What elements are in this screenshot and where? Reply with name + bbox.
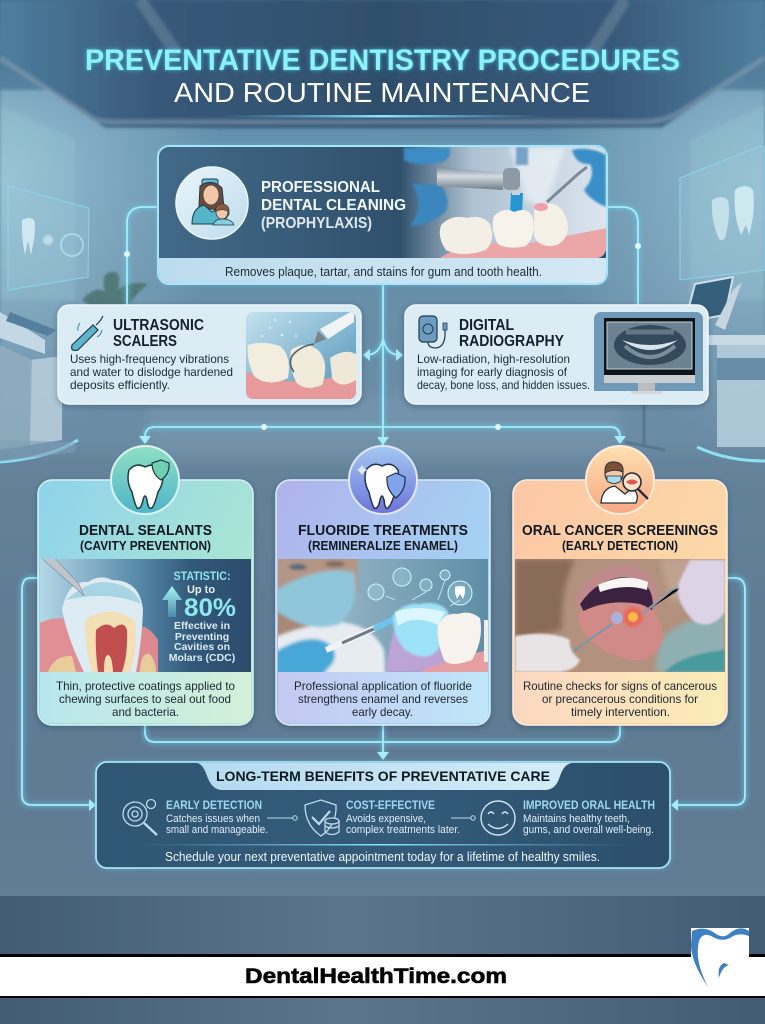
text: screenings description: Routine checks for signs of cancerous	[523, 679, 717, 693]
statistic callout: Up to	[187, 584, 215, 596]
heading: digital radiography: RADIOGRAPHY	[459, 333, 565, 350]
text: ultrasonic description: deposits efficiently.	[70, 378, 170, 392]
heading tab: LONG-TERM BENEFITS OF PREVENTATIVE CARE	[216, 768, 550, 784]
footer band	[0, 954, 765, 998]
photo: oral examination	[515, 559, 725, 672]
text: improved oral health: IMPROVED ORAL HEALTH	[523, 800, 655, 812]
title: PREVENTATIVE DENTISTRY PROCEDURES	[85, 44, 680, 77]
text: radiography description: decay, bone loss, and hidden issues.	[417, 378, 590, 392]
text: early detection: EARLY DETECTION	[166, 800, 262, 812]
text: ultrasonic description: and water to dislodge hardened	[70, 365, 233, 379]
heading: fluoride treatments: (REMINERALIZE ENAMEL)	[308, 539, 458, 553]
photo: fluoride application	[278, 559, 488, 672]
title	[85, 44, 680, 118]
text: screenings description	[515, 672, 725, 723]
connector lines and arrows	[22, 207, 745, 811]
logo: tooth	[691, 928, 749, 987]
statistic callout: Molars (CDC)	[169, 652, 235, 664]
text: screenings description: or precancerous conditions for	[542, 692, 698, 706]
text: sealants description	[40, 672, 251, 723]
text: fluoride description	[278, 672, 488, 723]
heading: professional dental cleaning	[261, 179, 406, 232]
text: ultrasonic description	[70, 352, 233, 392]
heading: dental sealants: (CAVITY PREVENTION)	[80, 539, 211, 553]
text: early detection: Catches issues when	[166, 813, 260, 825]
heading: oral cancer screenings: (EARLY DETECTION)	[562, 539, 678, 553]
heading: oral cancer screenings	[522, 523, 718, 553]
title: PREVENTATIVE DENTISTRY PROCEDURES	[85, 44, 680, 77]
text: early detection: small and manageable.	[166, 824, 268, 836]
arrow: upward increase	[162, 586, 182, 617]
heading: professional dental cleaning: PROFESSIONAL	[261, 179, 380, 196]
title: AND ROUTINE MAINTENANCE	[174, 77, 590, 108]
text: sealants description: chewing surfaces to seal out food	[59, 692, 231, 706]
statistic callout: Effective in	[174, 620, 230, 632]
icon: smiley	[481, 801, 515, 835]
caption strip: Removes plaque, tartar, and stains for gum and tooth health.	[225, 265, 542, 279]
panel: digital radiography	[405, 305, 708, 404]
call to action: Schedule your next preventative appointment today for a lifetime of healthy smiles.	[165, 850, 600, 864]
heading: professional dental cleaning: DENTAL CLEANING	[261, 197, 406, 214]
text: sealants description: and bacteria.	[112, 705, 179, 719]
statistic callout: Preventing	[175, 631, 229, 643]
text: radiography description: Low-radiation, high-resolution	[417, 352, 570, 366]
caption strip	[159, 258, 606, 283]
panel: dental sealants	[38, 446, 253, 725]
panel: oral cancer screenings	[513, 446, 727, 725]
text: early detection	[166, 800, 268, 836]
text: improved oral health: gums, and overall well-being.	[523, 824, 654, 836]
footer band: DentalHealthTime.com	[245, 965, 507, 988]
text: fluoride description: strengthens enamel and reverses	[298, 692, 468, 706]
photo: scaler on teeth	[246, 310, 356, 399]
text: ultrasonic description: Uses high-frequency vibrations	[70, 352, 229, 366]
text: screenings description: timely intervention.	[571, 705, 670, 719]
text: sealants description: Thin, protective coatings applied to	[56, 679, 235, 693]
heading: oral cancer screenings: ORAL CANCER SCREENINGS	[522, 523, 718, 539]
statistic callout: STATISTIC:	[174, 569, 230, 583]
icon: magnifier and gear	[123, 800, 157, 835]
icon: tooth with fluoride shield	[349, 446, 417, 514]
connector: detection to cost	[267, 816, 297, 820]
statistic callout	[162, 569, 236, 664]
icon: shield and coins	[305, 800, 339, 836]
heading: ultrasonic scalers: ULTRASONIC	[113, 317, 204, 334]
panel: professional dental cleaning	[157, 145, 608, 285]
heading: digital radiography: DIGITAL	[459, 317, 514, 334]
statistic callout: 80%	[184, 594, 236, 622]
heading: dental sealants: DENTAL SEALANTS	[79, 523, 212, 539]
panel: ultrasonic scalers	[58, 305, 361, 404]
heading: ultrasonic scalers	[113, 317, 204, 350]
photo: x-ray monitor	[594, 312, 703, 394]
heading: dental sealants	[79, 523, 212, 553]
text: radiography description: imaging for early diagnosis of	[417, 365, 568, 379]
connector: cost to health	[451, 816, 475, 820]
text: improved oral health: Maintains healthy teeth,	[523, 813, 630, 825]
heading: professional dental cleaning: (PROPHYLAXIS)	[261, 215, 372, 232]
heading: fluoride treatments	[298, 523, 468, 553]
text: radiography description	[417, 352, 590, 392]
panel: long-term benefits	[95, 761, 671, 869]
dark footer backdrop	[0, 896, 765, 1024]
icon: x-ray sensor	[419, 316, 447, 348]
heading: ultrasonic scalers: SCALERS	[113, 333, 177, 350]
text: improved oral health	[523, 800, 655, 836]
text: cost-effective: COST-EFFECTIVE	[346, 800, 435, 812]
text: cost-effective: complex treatments later.	[346, 824, 460, 836]
text: fluoride description: Professional application of fluoride	[294, 679, 472, 693]
heading: digital radiography	[459, 317, 565, 350]
text: fluoride description: early decay.	[352, 705, 413, 719]
heading tab	[197, 763, 572, 790]
panel: fluoride treatments	[270, 446, 490, 725]
icon: doctor with magnifier	[586, 446, 654, 514]
text: cost-effective: Avoids expensive,	[346, 813, 426, 825]
heading: fluoride treatments: FLUORIDE TREATMENTS	[298, 523, 468, 539]
icon: scaler handpiece	[72, 316, 103, 350]
photo: sealed molar cross-section	[40, 555, 251, 672]
icon: tooth with shield	[111, 446, 179, 514]
text: cost-effective	[346, 800, 460, 836]
photo: polishing teeth	[400, 147, 607, 258]
statistic callout: Cavities on	[174, 641, 230, 653]
icon: dental nurse and child	[176, 167, 248, 239]
